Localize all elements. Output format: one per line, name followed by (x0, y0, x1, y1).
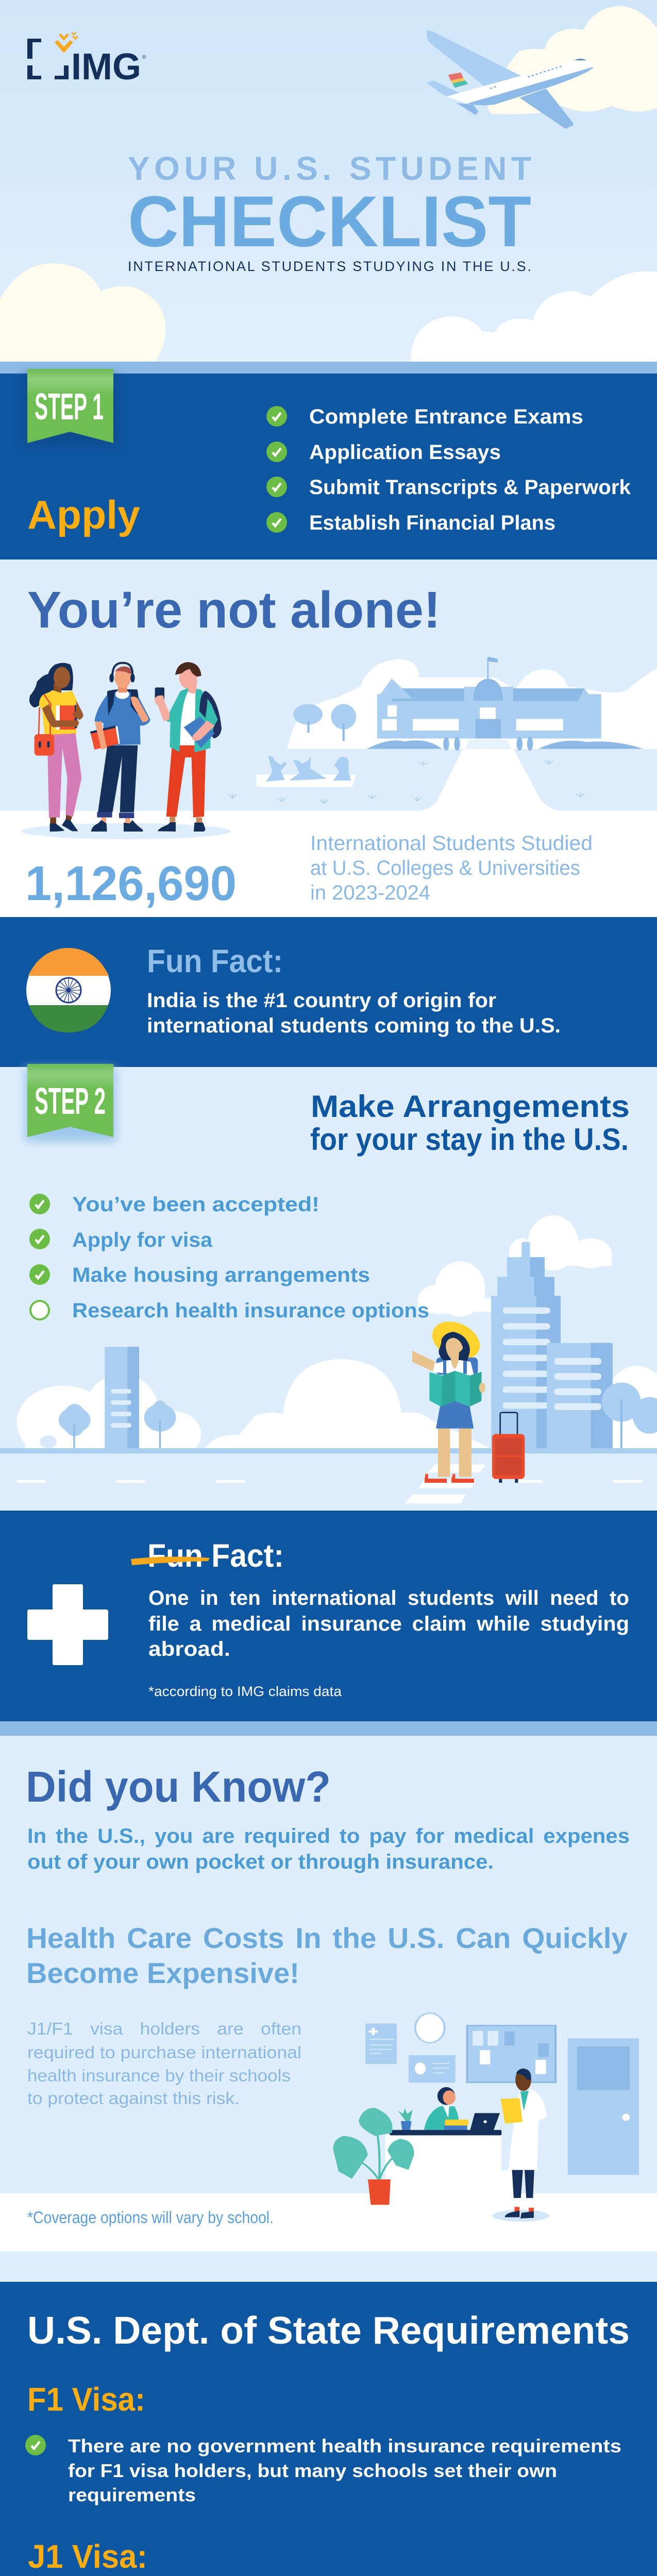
illustration: city background (17, 1215, 657, 1459)
fun fact: India text (147, 943, 561, 1037)
text: visa holders: J1/F1 visa holders are often (27, 2019, 301, 2038)
fact text: file a medical insurance claim while studying (148, 1613, 629, 1635)
laptop (470, 2113, 500, 2130)
checklist: step 2: Make housing arrangements (72, 1264, 370, 1286)
student one (29, 663, 83, 832)
illustration: students (22, 662, 231, 839)
icon: IMG logo: IMG (71, 46, 141, 88)
heading: you're not alone: You’re not alone! (27, 581, 441, 639)
desk top (390, 2130, 501, 2136)
checklist: step 2 (29, 1193, 429, 1322)
subtitle: INTERNATIONAL STUDENTS STUDYING IN THE U.S. (128, 259, 531, 274)
student two (90, 663, 150, 832)
road strip (0, 1448, 657, 1453)
heading: health care costs: Health Care Costs In the U.S. Can Quickly (26, 1922, 628, 1954)
stat caption: at U.S. Colleges & Universities (310, 857, 580, 879)
illustration: clinic (333, 2013, 639, 2222)
grass tufts (228, 760, 584, 804)
student three (155, 662, 222, 832)
central tower (521, 1242, 530, 1260)
heading: state requirements: U.S. Dept. of State Requirements (27, 2309, 630, 2352)
heading: make arrangements (310, 1089, 630, 1157)
heading: make arrangements: Make Arrangements (311, 1089, 630, 1124)
fact text: One in ten international students will need to (148, 1587, 629, 1609)
ribbon: step 1 (23, 369, 117, 446)
section background: step 2 (0, 1067, 657, 1511)
clock (415, 2013, 445, 2043)
fact heading with struck-out Fun: Fun Fact: (147, 1538, 284, 1574)
illustration: airplane (426, 30, 595, 129)
fact text: abroad. (148, 1638, 230, 1660)
text: visa holders: health insurance by their schools (27, 2066, 291, 2085)
section background: student count (0, 811, 657, 917)
text: visa holders (27, 2019, 301, 2108)
title line 2: CHECKLIST (128, 181, 531, 262)
panel: step 1 apply (0, 374, 657, 560)
title line 1: YOUR U.S. STUDENT (128, 150, 531, 187)
heading: J1 visa: J1 Visa: (28, 2538, 147, 2575)
icon: India flag (26, 948, 111, 1032)
icon: suitcase (492, 1413, 525, 1483)
list: F1 requirements: for F1 visa holders, but many schools set their own (68, 2460, 557, 2481)
heading: health care costs: Become Expensive! (26, 1957, 299, 1989)
panel: India fun fact (0, 917, 657, 1067)
fact text: *according to IMG claims data (148, 1684, 342, 1699)
heading: apply: Apply (27, 492, 140, 537)
fun fact: India text: India is the #1 country of origin for (147, 989, 496, 1012)
heading: F1 visa: F1 Visa: (27, 2381, 145, 2418)
note: coverage: *Coverage options will vary by school. (27, 2208, 274, 2227)
band above did you know (0, 1721, 657, 1736)
stat caption (310, 832, 593, 904)
readers (266, 756, 351, 782)
stat: student count: 1,126,690 (25, 856, 237, 911)
heading: make arrangements: for your stay in the U.S. (310, 1122, 629, 1157)
trees (293, 704, 356, 730)
icon: IMG logo (27, 32, 146, 88)
title block (128, 150, 531, 274)
text: medical expenses: In the U.S., you are required to pay for medical expenes (27, 1825, 630, 1848)
fun fact: India text: international students coming to the U.S. (147, 1014, 561, 1037)
section background: you're not alone (0, 560, 657, 811)
panel: state department requirements (0, 2282, 657, 2576)
checklist: step 1: Complete Entrance Exams (309, 405, 583, 428)
fact text (148, 1587, 629, 1699)
door (568, 2038, 639, 2175)
stat caption: International Students Studied (310, 832, 593, 855)
small plant (398, 2108, 413, 2121)
stomach card (409, 2055, 456, 2082)
checklist: step 1 (266, 405, 631, 534)
ribbon: step 1: STEP 1 (35, 386, 104, 428)
road markings (17, 1464, 642, 1503)
checklist: step 2: Research health insurance options (72, 1299, 429, 1322)
doctor (492, 2069, 549, 2222)
floor: did you know (0, 2193, 657, 2251)
wall chart (365, 2024, 397, 2064)
list: F1 requirements: There are no government health insurance requirements (68, 2435, 621, 2456)
heading: health care costs (26, 1922, 628, 1989)
desk body (385, 2134, 501, 2194)
heading: did you know: Did you Know? (26, 1762, 331, 1811)
icon: medical cross (27, 1584, 108, 1665)
left trees (59, 1400, 176, 1436)
panel: medical fact (0, 1511, 657, 1721)
text: visa holders: to protect against this risk. (27, 2089, 240, 2108)
section background: step 1 band (0, 362, 657, 374)
checklist: step 1: Establish Financial Plans (309, 512, 555, 534)
ribbon: step 2: STEP 2 (35, 1081, 106, 1122)
list: F1 requirements (25, 2435, 621, 2505)
folders (445, 2120, 468, 2126)
checklist: step 1: Application Essays (309, 441, 501, 464)
illustration: hero clouds (0, 6, 657, 362)
section background: did you know (0, 1736, 657, 2282)
left building (105, 1347, 139, 1448)
checklist: step 2: You’ve been accepted! (72, 1193, 319, 1216)
text: medical expenses: out of your own pocket or through insurance. (27, 1851, 494, 1873)
section background: hero sky (0, 0, 657, 362)
stat caption: in 2023-2024 (310, 882, 430, 904)
checklist: step 1: Submit Transcripts & Paperwork (309, 476, 631, 499)
building (377, 694, 601, 738)
ribbon: step 2 (25, 1064, 116, 1142)
notice board (467, 2026, 555, 2082)
right trees (602, 1382, 641, 1421)
street surface (0, 1453, 657, 1511)
icon: IMG logo: ® (142, 55, 146, 60)
list: F1 requirements: requirements (68, 2484, 196, 2505)
fun fact: India text: Fun Fact: (147, 943, 283, 979)
checklist: step 2: Apply for visa (72, 1229, 213, 1251)
illustration: traveler with map (412, 1314, 486, 1483)
text: medical expenses (27, 1825, 630, 1873)
right building (547, 1343, 613, 1448)
floor plant (353, 2131, 400, 2180)
illustration: college campus (228, 657, 657, 811)
text: visa holders: required to purchase international (27, 2043, 301, 2062)
receptionist (437, 2087, 455, 2105)
clouds (17, 1215, 657, 1459)
